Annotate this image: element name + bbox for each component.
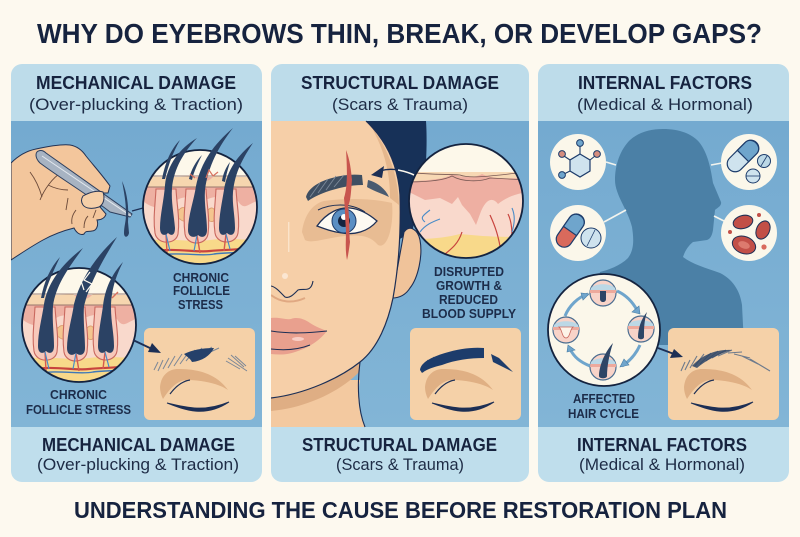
header: internal factors xyxy=(577,73,753,114)
icon: capsule and tablets xyxy=(721,134,777,190)
text: chronic follicle stress, upper: FOLLICLE xyxy=(173,283,230,298)
header: mechanical damage xyxy=(29,73,243,114)
text: disrupted growth: GROWTH & xyxy=(436,278,502,293)
icon: hand with tweezers xyxy=(11,145,132,260)
icon: mouth xyxy=(271,318,327,355)
scar tissue circle xyxy=(405,144,527,262)
text: affected hair cycle xyxy=(568,394,639,418)
icon: head silhouette xyxy=(595,129,744,345)
icon: ear xyxy=(392,228,421,298)
inset: sparse eyebrow xyxy=(144,328,255,420)
footer: structural damage xyxy=(302,435,497,474)
lower follicle circle xyxy=(22,237,136,386)
text: chronic follicle stress, lower xyxy=(26,390,131,414)
footer: structural damage: (Scars & Trauma) xyxy=(336,455,464,474)
inset: brow with gap xyxy=(410,328,521,420)
text: chronic follicle stress, lower: FOLLICLE STRESS xyxy=(26,402,131,417)
header: internal factors: INTERNAL FACTORS xyxy=(578,73,752,93)
text: disrupted growth: DISRUPTED xyxy=(434,264,504,279)
header: mechanical damage: (Over-plucking & Traction) xyxy=(29,95,243,114)
icon: eye xyxy=(317,205,377,234)
text: disrupted growth xyxy=(422,267,516,318)
panel: structural damage xyxy=(271,64,529,482)
footer: internal factors xyxy=(577,435,747,474)
footer: mechanical damage xyxy=(37,435,239,474)
header: structural damage xyxy=(301,73,499,114)
inset: thinning brow xyxy=(668,328,779,420)
text: affected hair cycle: HAIR CYCLE xyxy=(568,406,639,421)
footer: internal factors: INTERNAL FACTORS xyxy=(577,435,747,455)
icon: molecule xyxy=(550,134,606,190)
connector lines xyxy=(604,162,726,222)
icon: plucked hair xyxy=(122,181,143,237)
header: mechanical damage: MECHANICAL DAMAGE xyxy=(36,73,236,93)
header: structural damage: STRUCTURAL DAMAGE xyxy=(301,73,499,93)
panel: internal factors xyxy=(538,64,789,482)
footer: mechanical damage: (Over-plucking & Traction) xyxy=(37,455,239,474)
icon: brow with scar gap xyxy=(306,175,389,201)
icon: pill and tablet xyxy=(550,205,606,261)
header: internal factors: (Medical & Hormonal) xyxy=(577,95,753,114)
text: disrupted growth: BLOOD SUPPLY xyxy=(422,306,516,321)
text: affected hair cycle: AFFECTED xyxy=(573,391,635,406)
footer: mechanical damage: MECHANICAL DAMAGE xyxy=(42,435,235,455)
text: chronic follicle stress, lower: CHRONIC xyxy=(50,387,108,402)
header: structural damage: (Scars & Trauma) xyxy=(332,95,468,114)
text: chronic follicle stress, upper xyxy=(174,273,230,309)
text: disrupted growth: REDUCED xyxy=(439,292,498,307)
footer: internal factors: (Medical & Hormonal) xyxy=(579,455,745,474)
text: chronic follicle stress, upper: STRESS xyxy=(178,297,223,312)
illustration: face xyxy=(271,121,400,427)
upper follicle circle xyxy=(143,128,257,268)
arrow to sparse brow xyxy=(133,340,161,353)
text: chronic follicle stress, upper: CHRONIC xyxy=(173,270,230,285)
bottom tagline: UNDERSTANDING THE CAUSE BEFORE RESTORATION PLAN xyxy=(74,497,727,523)
arrow to scar xyxy=(371,166,414,178)
icon: scar xyxy=(344,150,352,260)
icon: hair xyxy=(366,121,427,240)
footer: structural damage: STRUCTURAL DAMAGE xyxy=(302,435,497,455)
icon: red blood cells xyxy=(721,205,777,261)
arrow to thinning brow xyxy=(658,348,683,358)
title: WHY DO EYEBROWS THIN, BREAK, OR DEVELOP GAPS? xyxy=(37,18,762,49)
panel: mechanical damage xyxy=(11,64,262,482)
icon: neck xyxy=(271,380,365,427)
hair cycle circle xyxy=(548,274,660,386)
